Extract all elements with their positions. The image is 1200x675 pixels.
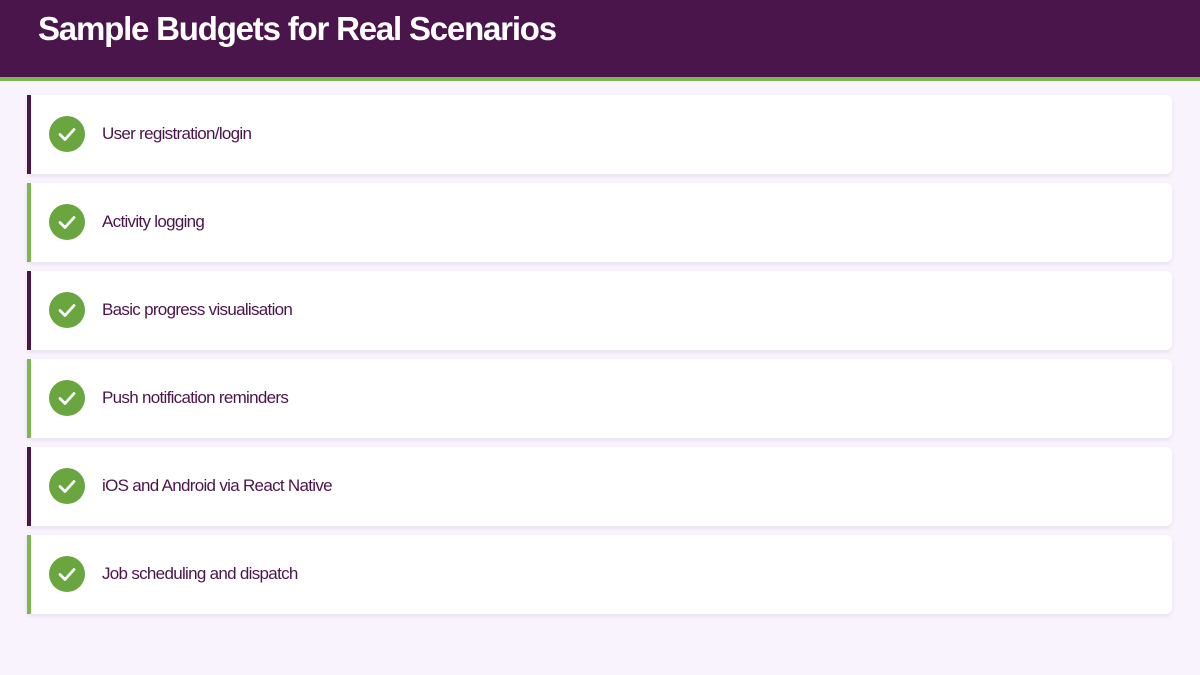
icon: check — [49, 468, 85, 504]
card: activity logging — [27, 183, 1172, 262]
text: Activity logging — [102, 212, 204, 231]
icon: check — [49, 116, 85, 152]
card: job scheduling — [27, 535, 1172, 614]
text: User registration/login — [102, 124, 251, 143]
header — [0, 0, 1200, 81]
card: user registration — [27, 95, 1172, 174]
card: push notifications — [27, 359, 1172, 438]
icon: check — [49, 292, 85, 328]
text: Basic progress visualisation — [102, 300, 292, 319]
text: Job scheduling and dispatch — [102, 564, 298, 583]
text: Push notification reminders — [102, 388, 288, 407]
icon: check — [49, 556, 85, 592]
text: iOS and Android via React Native — [102, 476, 332, 495]
icon: check — [49, 204, 85, 240]
card: react native — [27, 447, 1172, 526]
icon: check — [49, 380, 85, 416]
card: progress visualisation — [27, 271, 1172, 350]
title: Sample Budgets for Real Scenarios — [38, 10, 556, 47]
